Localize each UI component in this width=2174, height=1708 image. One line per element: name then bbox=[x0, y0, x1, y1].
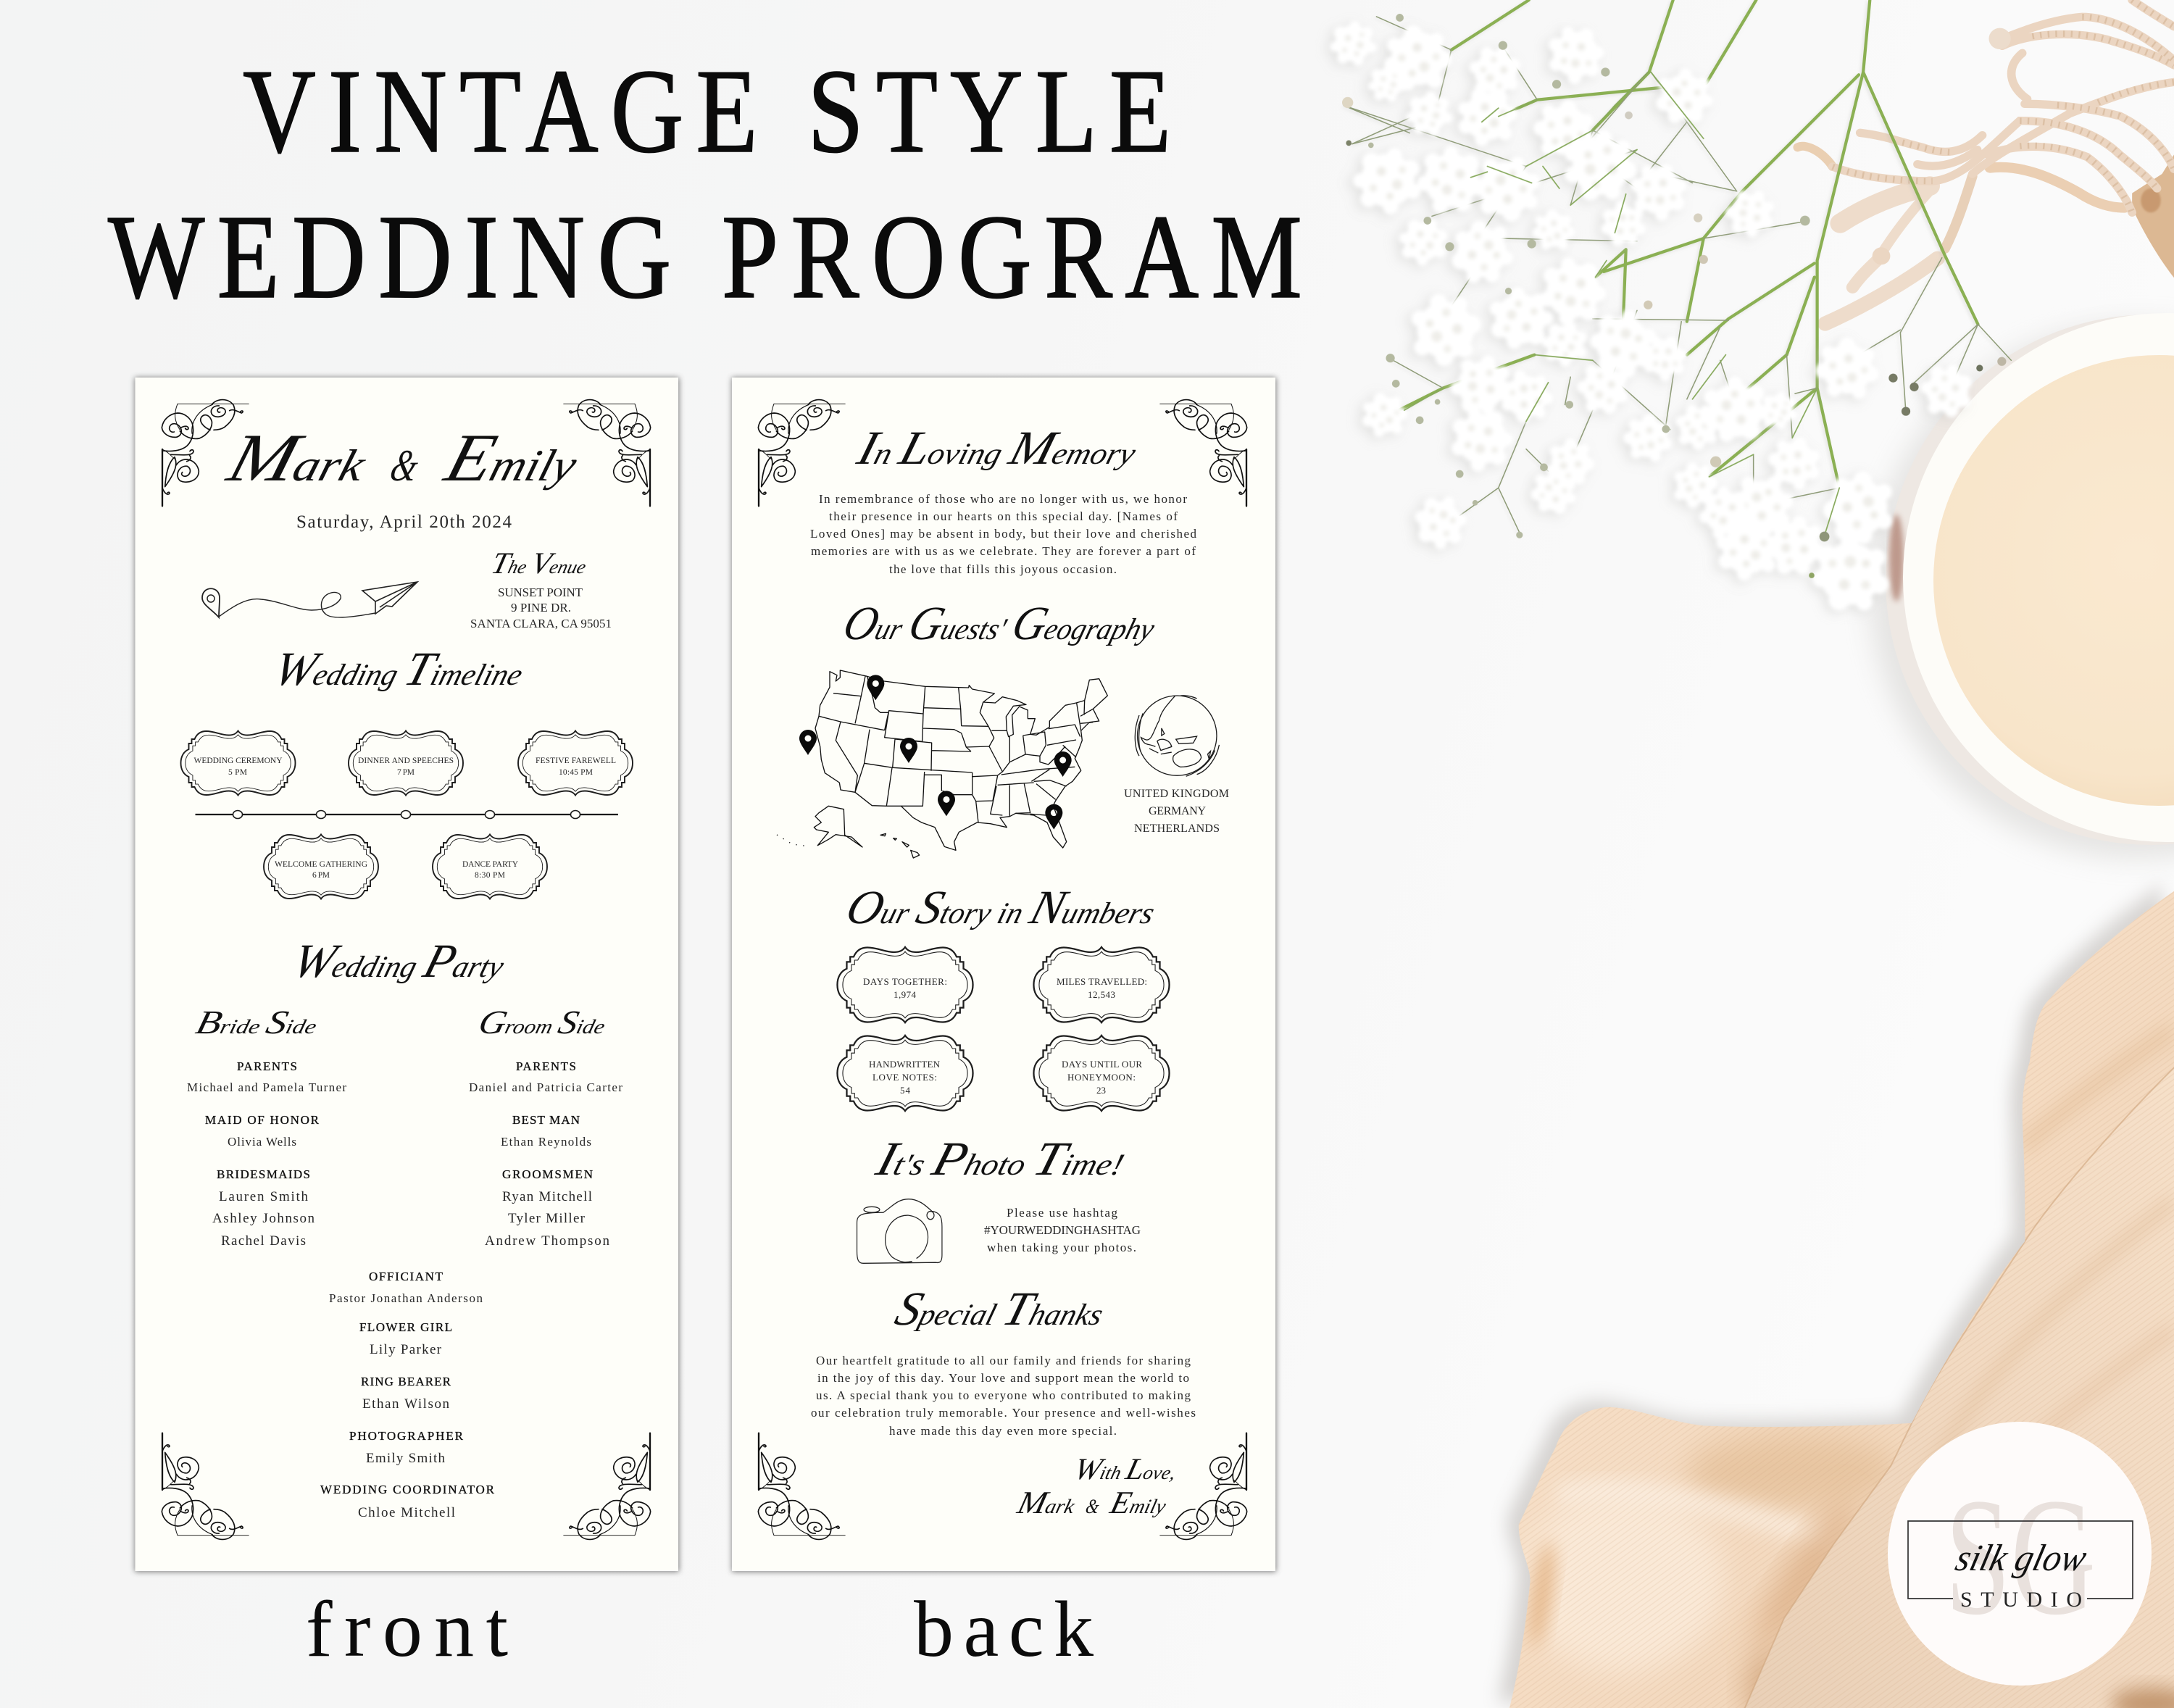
text: memorial paragraph: the love that fills this joyous occasion. bbox=[889, 562, 1117, 576]
text: other wedding party roles: OFFICIANT bbox=[369, 1270, 443, 1283]
flower buds bbox=[1342, 14, 2006, 578]
logo: silk glow studio: SG bbox=[1945, 1464, 2096, 1650]
text: date: Saturday, April 20th 2024 bbox=[296, 512, 512, 532]
plaque: dance party: DANCE PARTY bbox=[462, 860, 519, 869]
plaque: dinner and speeches: 7 PM bbox=[397, 768, 415, 777]
plaque: festive farewell: 10:45 PM bbox=[559, 768, 593, 777]
text: groom side roster: BEST MAN bbox=[512, 1113, 580, 1127]
plaque: days until honeymoon: 23 bbox=[1096, 1085, 1106, 1096]
text: thank-you paragraph bbox=[811, 1354, 1196, 1438]
timeline axis with dots bbox=[196, 810, 618, 819]
plaque: miles travelled: 12,543 bbox=[1088, 989, 1115, 1000]
heading: wedding party: Wedding Party bbox=[287, 934, 513, 988]
plaque: miles travelled bbox=[1033, 947, 1170, 1022]
text: venue bbox=[470, 547, 612, 630]
map pin: Georgia/Florida bbox=[1045, 804, 1062, 830]
text: hashtag note: Please use hashtag bbox=[1007, 1206, 1117, 1220]
text: groom side roster bbox=[469, 1059, 622, 1249]
text: international guest countries: GERMANY bbox=[1149, 805, 1206, 817]
text: thank-you paragraph: have made this day even more special. bbox=[889, 1424, 1117, 1438]
text: other wedding party roles: RING BEARER bbox=[361, 1375, 451, 1388]
plaque: days until honeymoon: HONEYMOON: bbox=[1067, 1072, 1136, 1083]
plaque: handwritten love notes bbox=[837, 1036, 973, 1111]
plaque: welcome gathering bbox=[264, 835, 378, 899]
text: signature: & bbox=[1084, 1496, 1101, 1518]
text: bride side roster: Ashley Johnson bbox=[212, 1211, 315, 1226]
text: venue: SANTA CLARA, CA 95051 bbox=[470, 617, 612, 630]
logo: silk glow studio: silk glow bbox=[1952, 1538, 2091, 1579]
text: hashtag note bbox=[984, 1206, 1141, 1254]
panel: back of program bbox=[732, 378, 1276, 1572]
text: signature: Emily bbox=[1107, 1485, 1171, 1520]
heading: special thanks: Special Thanks bbox=[890, 1282, 1112, 1336]
twisted rope strands bbox=[1833, 0, 2174, 212]
text: thank-you paragraph: our celebration truly memorable. Your presence and well-wishes bbox=[811, 1406, 1196, 1420]
text: memorial paragraph bbox=[810, 492, 1197, 576]
text: hashtag note: #YOURWEDDINGHASHTAG bbox=[984, 1223, 1141, 1237]
text: international guest countries: UNITED KINGDOM bbox=[1124, 788, 1229, 800]
text: groom side roster: Daniel and Patricia Carter bbox=[469, 1080, 622, 1094]
text: thank-you paragraph: in the joy of this day. Your love and support mean the world to bbox=[817, 1371, 1189, 1385]
heading: wedding timeline: Wedding Timeline bbox=[268, 642, 531, 696]
text: bride side roster: Olivia Wells bbox=[228, 1135, 296, 1149]
map: United States with guest pins bbox=[777, 670, 1107, 858]
title: VINTAGE STYLE bbox=[243, 44, 1183, 178]
map outline and state lines bbox=[777, 670, 1107, 858]
text: bride side roster: Lauren Smith bbox=[219, 1189, 309, 1204]
heading: bride side: Bride Side bbox=[192, 1004, 322, 1041]
text: bride side roster: MAID OF HONOR bbox=[205, 1113, 320, 1127]
fold shadow and highlight shading bbox=[1685, 1434, 1898, 1509]
text: venue: 9 PINE DR. bbox=[511, 601, 571, 615]
map pin: Colorado bbox=[900, 738, 917, 763]
short stems over the blossoms bbox=[1404, 72, 1839, 532]
photo: peach linen scarf bbox=[1449, 870, 2174, 1708]
plaque: wedding ceremony: 5 PM bbox=[228, 768, 247, 777]
text: memorial paragraph: In remembrance of those who are no longer with us, we honor bbox=[819, 492, 1187, 506]
plaque: wedding ceremony bbox=[181, 730, 296, 796]
tassels bbox=[1798, 146, 2125, 324]
map pin: Virginia bbox=[1054, 751, 1072, 777]
scarf corner at the top right bbox=[2132, 154, 2174, 278]
heading: couple names: Emily bbox=[436, 420, 589, 496]
ornate corner flourishes (back) bbox=[758, 400, 1247, 1539]
text: bride side roster: PARENTS bbox=[237, 1059, 297, 1073]
plaque: days until honeymoon: DAYS UNTIL OUR bbox=[1062, 1059, 1142, 1070]
text: groom side roster: PARENTS bbox=[516, 1059, 576, 1073]
text: signature: Mark bbox=[1014, 1485, 1080, 1520]
text: memorial paragraph: memories are with us as we celebrate. They are forever a part of bbox=[811, 544, 1196, 558]
plaque: wedding ceremony: WEDDING CEREMONY bbox=[194, 757, 283, 765]
text: other wedding party roles: WEDDING COORDINATOR bbox=[320, 1483, 495, 1496]
text: memorial paragraph: their presence in our hearts on this special day. [Names of bbox=[829, 509, 1178, 523]
plaque: dinner and speeches: DINNER AND SPEECHES bbox=[358, 757, 454, 765]
plaque: handwritten love notes: HANDWRITTEN bbox=[869, 1059, 941, 1070]
text: bride side roster bbox=[187, 1059, 346, 1249]
logo: silk glow studio: STUDIO bbox=[1960, 1588, 2082, 1612]
text: back caption: back bbox=[914, 1585, 1094, 1673]
plaque: welcome gathering: 6 PM bbox=[312, 871, 330, 880]
text: thank-you paragraph: us. A special thank you to everyone who contributed to making bbox=[816, 1388, 1191, 1402]
text: other wedding party roles: Chloe Mitchell bbox=[358, 1505, 455, 1520]
plaque: dinner and speeches bbox=[349, 730, 463, 796]
text: groom side roster: Andrew Thompson bbox=[485, 1233, 610, 1249]
text: international guest countries bbox=[1124, 788, 1229, 835]
plaque: handwritten love notes: LOVE NOTES: bbox=[872, 1072, 937, 1083]
text: bride side roster: BRIDESMAIDS bbox=[217, 1167, 310, 1181]
map pin: Washington/Idaho bbox=[867, 675, 884, 700]
heading: couple names bbox=[219, 420, 589, 496]
photo: rope fringe of the scarf bbox=[1798, 0, 2174, 324]
text: bride side roster: Michael and Pamela Turner bbox=[187, 1080, 346, 1094]
heading: groom side: Groom Side bbox=[475, 1004, 610, 1041]
plaque: festive farewell: FESTIVE FAREWELL bbox=[536, 757, 616, 765]
text: other wedding party roles: FLOWER GIRL bbox=[359, 1320, 452, 1334]
heading: in loving memory: In Loving Memory bbox=[851, 421, 1145, 475]
logo: silk glow studio bbox=[1888, 1422, 2152, 1686]
text: other wedding party roles: Emily Smith bbox=[366, 1451, 445, 1466]
text: memorial paragraph: Loved Ones] may be absent in body, but their love and cherished bbox=[810, 527, 1197, 541]
text: thank-you paragraph: Our heartfelt gratitude to all our family and friends for sharing bbox=[816, 1354, 1191, 1367]
text: groom side roster: Ryan Mitchell bbox=[502, 1189, 592, 1204]
heading: it's photo time: It's Photo Time! bbox=[870, 1132, 1133, 1186]
map pin: California bbox=[799, 730, 817, 755]
icon: camera bbox=[857, 1199, 942, 1263]
text: groom side roster: Tyler Miller bbox=[508, 1211, 586, 1226]
title bbox=[108, 44, 1315, 323]
photo: baby's breath flowers bbox=[1330, 0, 2011, 622]
ornate corner flourishes (front) bbox=[162, 400, 651, 1539]
timeline plaques and axis bbox=[181, 730, 633, 899]
photo: coffee cup bbox=[1870, 313, 2174, 859]
text: hashtag note: when taking your photos. bbox=[987, 1241, 1136, 1254]
icon: pin and paper plane flight path bbox=[202, 582, 417, 617]
plaque: days together bbox=[837, 947, 973, 1022]
plaque: handwritten love notes: 54 bbox=[900, 1085, 910, 1096]
heading: couple names: & bbox=[386, 441, 423, 491]
plaque: dance party: 8:30 PM bbox=[475, 871, 505, 880]
text: front caption: front bbox=[306, 1585, 508, 1673]
plaque: dance party bbox=[433, 835, 547, 899]
heading: our story in numbers: Our Story in Numbers bbox=[841, 880, 1163, 934]
flower blossoms bbox=[1330, 11, 1982, 622]
flower stems bbox=[1344, 0, 2011, 538]
text: international guest countries: NETHERLANDS bbox=[1134, 822, 1220, 835]
text: signature bbox=[1014, 1453, 1180, 1520]
plaque: days together: 1,974 bbox=[894, 989, 916, 1000]
text: groom side roster: Ethan Reynolds bbox=[501, 1135, 591, 1149]
text: venue: The Venue bbox=[488, 547, 591, 580]
panel: front of program bbox=[135, 378, 679, 1572]
text: other wedding party roles: Lily Parker bbox=[370, 1342, 442, 1357]
heading: couple names: Mark bbox=[219, 420, 378, 496]
heading: our guests' geography: Our Guests' Geography bbox=[838, 596, 1164, 650]
icon: globe bbox=[1135, 696, 1219, 776]
plaque: days until honeymoon bbox=[1033, 1036, 1170, 1111]
plaque: days together: DAYS TOGETHER: bbox=[863, 976, 947, 987]
map pin: Texas bbox=[938, 791, 955, 816]
text: signature: With Love, bbox=[1071, 1453, 1180, 1486]
text: other wedding party roles: PHOTOGRAPHER bbox=[349, 1429, 464, 1443]
plaque: welcome gathering: WELCOME GATHERING bbox=[275, 860, 367, 869]
plaque: festive farewell bbox=[518, 730, 633, 796]
text: other wedding party roles: Ethan Wilson bbox=[362, 1396, 449, 1412]
text: groom side roster: GROOMSMEN bbox=[502, 1167, 593, 1181]
text: other wedding party roles bbox=[320, 1270, 495, 1520]
text: venue: SUNSET POINT bbox=[498, 586, 583, 599]
text: other wedding party roles: Pastor Jonathan Anderson bbox=[329, 1291, 483, 1305]
title: WEDDING PROGRAM bbox=[108, 190, 1315, 323]
text: bride side roster: Rachel Davis bbox=[221, 1233, 306, 1249]
plaque: miles travelled: MILES TRAVELLED: bbox=[1057, 976, 1147, 987]
